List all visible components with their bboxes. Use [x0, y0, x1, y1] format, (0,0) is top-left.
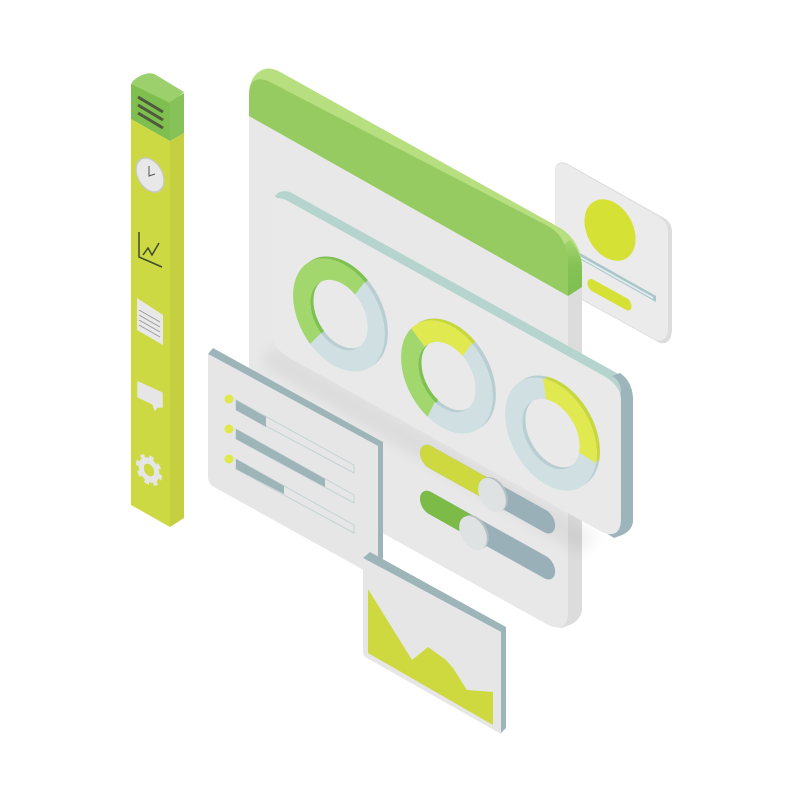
panel shadow on window	[262, 345, 600, 555]
sidebar front face	[131, 119, 170, 527]
donut chart 1	[302, 254, 379, 374]
icon: gear	[138, 453, 160, 487]
panel: sidebar	[131, 73, 184, 527]
text placeholder bar	[578, 252, 656, 302]
area chart	[368, 589, 493, 725]
chart card depth	[363, 552, 506, 734]
panel: list card	[208, 348, 383, 578]
list card face	[208, 354, 378, 578]
window title bar	[249, 69, 582, 296]
yellow pill	[593, 285, 626, 304]
icon: yellow avatar circle	[584, 192, 636, 268]
list row 3	[224, 454, 354, 533]
card face	[271, 198, 621, 534]
icon: document	[137, 298, 163, 345]
list card depth	[208, 348, 383, 568]
icon: line graph	[139, 232, 162, 267]
donut chart 3	[514, 373, 591, 493]
list row 2	[224, 424, 354, 503]
card depth	[275, 191, 633, 537]
panel: main window	[249, 69, 582, 628]
sidebar header	[131, 73, 184, 141]
icon: menu	[138, 97, 163, 128]
icon: chat bubble	[138, 382, 162, 410]
slider 1	[430, 457, 545, 521]
panel: area chart card	[363, 552, 506, 734]
icon: clock	[136, 153, 164, 197]
window body	[249, 110, 582, 628]
panel: top-right profile card	[555, 162, 672, 343]
list row 1	[224, 394, 354, 473]
sidebar side face	[170, 133, 184, 527]
donut chart 2	[410, 316, 487, 436]
slider 2	[430, 503, 545, 567]
chart card face	[363, 558, 501, 734]
panel: donut charts card	[271, 191, 633, 538]
